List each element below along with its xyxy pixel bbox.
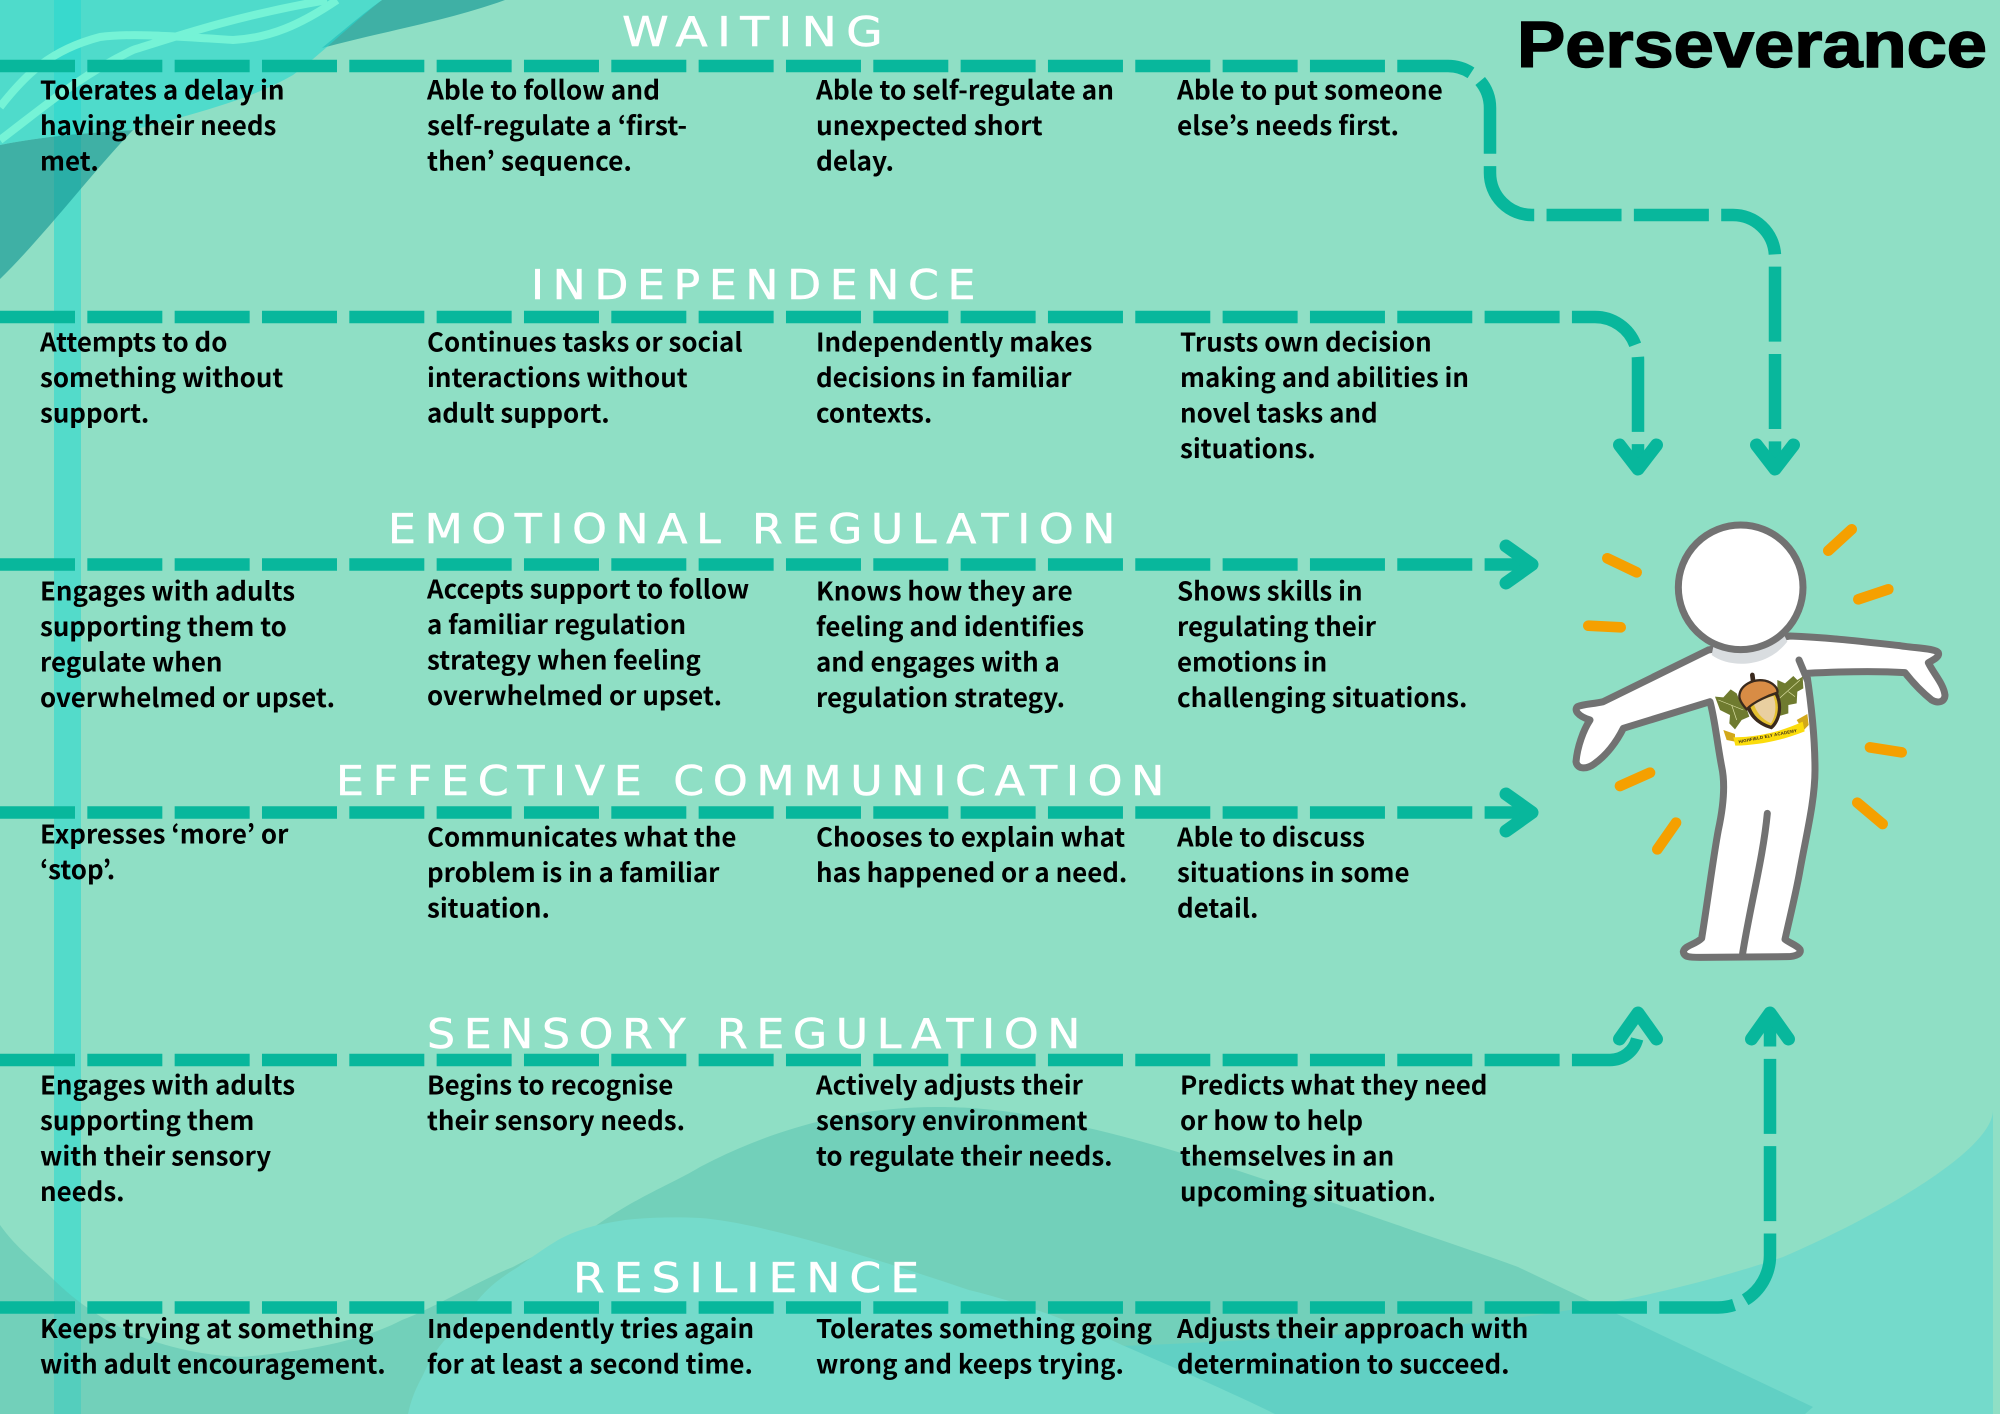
text: resilience col 3: wrong and keeps trying. <box>816 1344 1124 1382</box>
arrow: waiting arrowhead <box>1756 445 1794 469</box>
icon: body <box>1576 636 1945 957</box>
path: emotional regulation <box>0 558 1530 571</box>
arrow: sensory regulation arrowhead <box>1620 1013 1656 1039</box>
text: emotional regulation col 4: regulating their <box>1177 607 1377 644</box>
text: effective communication col 2: Communicates what the <box>427 817 736 854</box>
text: independence col 1: support. <box>40 393 149 430</box>
path: resilience <box>0 1013 1770 1308</box>
figure: person with rays and badge <box>1576 525 1945 957</box>
background: bottom mountain <box>0 1107 1813 1414</box>
heading: resilience: RESILIENCE <box>573 1254 928 1302</box>
background: dark top-left wave <box>0 0 505 279</box>
icon: leaf veins <box>1718 680 1800 720</box>
icon: banner tails <box>1723 714 1809 742</box>
text: emotional regulation col 3: regulation strategy. <box>816 678 1065 715</box>
text: independence col 4: situations. <box>1180 429 1316 466</box>
text: independence col 3: contexts. <box>816 393 932 430</box>
text: sensory regulation col 4: or how to help <box>1180 1101 1363 1138</box>
text: sensory regulation col 1: with their sensory <box>40 1136 271 1173</box>
text: effective communication col 4: Able to discuss <box>1176 817 1365 854</box>
icon: orange rays <box>1588 529 1902 849</box>
text: emotional regulation col 2: Accepts support to follow <box>426 569 749 606</box>
text: emotional regulation col 1: overwhelmed or upset. <box>40 678 335 715</box>
text: independence col 4: Trusts own decision <box>1180 322 1432 359</box>
icon: neck shadow <box>1712 627 1787 664</box>
arrow: independence arrowhead <box>1620 445 1656 469</box>
text: emotional regulation col 3: and engages with a <box>816 642 1060 679</box>
text: emotional regulation col 4: Shows skills in <box>1177 571 1363 608</box>
text: sensory regulation col 3: Actively adjusts their <box>815 1065 1084 1102</box>
text: resilience col 4: determination to succeed. <box>1177 1344 1510 1382</box>
text: emotional regulation col 3: Knows how they are <box>816 571 1073 608</box>
icon: acorn <box>1739 675 1781 729</box>
text: effective communication col 4: situations in some <box>1177 853 1410 890</box>
icon: oak leaves <box>1715 676 1803 729</box>
text: independence col 1: Attempts to do <box>39 322 227 359</box>
path: sensory regulation <box>0 1032 1638 1060</box>
text: sensory regulation col 3: to regulate their needs. <box>816 1136 1113 1173</box>
background: vertical translucent strip <box>54 0 81 1414</box>
text: effective communication col 3: Chooses to explain what <box>816 817 1125 854</box>
text: emotional regulation col 1: supporting them to <box>40 607 287 644</box>
text: waiting col 1: met. <box>40 142 99 178</box>
text: sensory regulation col 1: needs. <box>40 1172 125 1209</box>
text: emotional regulation col 3: feeling and identifies <box>816 607 1084 644</box>
arrow: emotional regulation arrowhead <box>1506 546 1532 583</box>
text: waiting col 2: Able to follow and <box>426 68 660 108</box>
background: bottom teal hill <box>408 1217 1275 1414</box>
text: resilience col 3: Tolerates something going <box>816 1309 1152 1346</box>
title: Perseverance <box>1517 8 1987 81</box>
arrow: effective communication arrowhead <box>1506 794 1532 831</box>
heading: emotional regulation: EMOTIONAL REGULATION <box>388 505 1124 553</box>
background: bottom right teal blob <box>1000 1110 1993 1414</box>
text: emotional regulation col 4: emotions in <box>1177 642 1327 679</box>
text: sensory regulation col 1: supporting them <box>40 1101 254 1138</box>
text: emotional regulation col 4: challenging situations. <box>1177 678 1467 715</box>
icon: banner <box>1733 722 1805 746</box>
text: banner label: HIGHFIELD ELY ACADEMY <box>1738 728 1797 744</box>
heading: independence: INDEPENDENCE <box>531 261 984 309</box>
text: waiting col 3: Able to self-regulate an <box>815 68 1114 108</box>
text: sensory regulation col 2: their sensory needs. <box>427 1101 685 1138</box>
text: resilience col 2: Independently tries again <box>427 1309 754 1346</box>
text: waiting col 3: unexpected short <box>816 104 1043 143</box>
text: independence col 1: something without <box>40 358 283 395</box>
text: waiting col 4: Able to put someone <box>1176 68 1443 108</box>
path: waiting <box>0 66 1775 469</box>
text: resilience col 1: with adult encouragement. <box>40 1344 386 1382</box>
text: waiting col 4: else’s needs first. <box>1177 104 1399 143</box>
text: waiting col 2: then’ sequence. <box>427 140 632 178</box>
text: emotional regulation col 2: strategy when feeling <box>427 640 701 677</box>
icon: acorn badge <box>1715 675 1809 746</box>
path: independence <box>0 317 1638 469</box>
icon: head <box>1678 525 1803 650</box>
text: emotional regulation col 2: overwhelmed or upset. <box>427 676 722 713</box>
heading: sensory regulation: SENSORY REGULATION <box>427 1010 1089 1058</box>
text: sensory regulation col 1: Engages with adults <box>40 1065 295 1102</box>
text: waiting col 3: delay. <box>816 140 894 178</box>
text: independence col 3: decisions in familiar <box>816 358 1072 395</box>
text: independence col 4: novel tasks and <box>1180 393 1378 430</box>
text: independence col 2: interactions without <box>427 358 688 395</box>
text: independence col 4: making and abilities in <box>1180 358 1469 395</box>
text: sensory regulation col 4: themselves in an <box>1180 1136 1394 1173</box>
text: sensory regulation col 3: sensory environment <box>816 1101 1088 1138</box>
background: bright top-left wave <box>0 0 382 145</box>
text: independence col 3: Independently makes <box>816 322 1092 359</box>
text: effective communication col 3: has happened or a need. <box>816 853 1127 890</box>
background: light ribbons top-left <box>0 0 337 140</box>
text: emotional regulation col 2: a familiar regulation <box>427 605 686 642</box>
arrow: resilience arrowhead <box>1752 1013 1788 1039</box>
icon: armpit and leg lines <box>1743 660 1807 953</box>
text: emotional regulation col 1: regulate when <box>40 642 223 679</box>
text: independence col 2: adult support. <box>427 393 610 430</box>
text: waiting col 1: having their needs <box>40 106 276 143</box>
text: effective communication col 2: problem is in a familiar <box>427 853 720 890</box>
text: resilience col 4: Adjusts their approach with <box>1176 1309 1528 1346</box>
text: effective communication col 1: ‘stop’. <box>40 850 115 887</box>
text: resilience col 2: for at least a second time. <box>427 1344 753 1382</box>
text: sensory regulation col 4: upcoming situation. <box>1180 1172 1436 1209</box>
text: sensory regulation col 4: Predicts what they need <box>1180 1065 1487 1102</box>
heading: effective communication: EFFECTIVE COMMUNICATION <box>336 757 1173 805</box>
path: effective communication <box>0 806 1530 819</box>
text: effective communication col 1: Expresses ‘more’ or <box>40 814 289 851</box>
text: independence col 2: Continues tasks or social <box>427 322 743 359</box>
text: effective communication col 2: situation. <box>427 888 550 925</box>
text: effective communication col 4: detail. <box>1177 888 1258 925</box>
text: emotional regulation col 1: Engages with adults <box>40 571 295 608</box>
text: waiting col 1: Tolerates a delay in <box>40 70 284 108</box>
text: sensory regulation col 2: Begins to recognise <box>427 1065 673 1102</box>
text: waiting col 2: self-regulate a ‘first- <box>427 104 687 143</box>
text: resilience col 1: Keeps trying at something <box>40 1309 374 1346</box>
heading: waiting: WAITING <box>622 8 892 56</box>
